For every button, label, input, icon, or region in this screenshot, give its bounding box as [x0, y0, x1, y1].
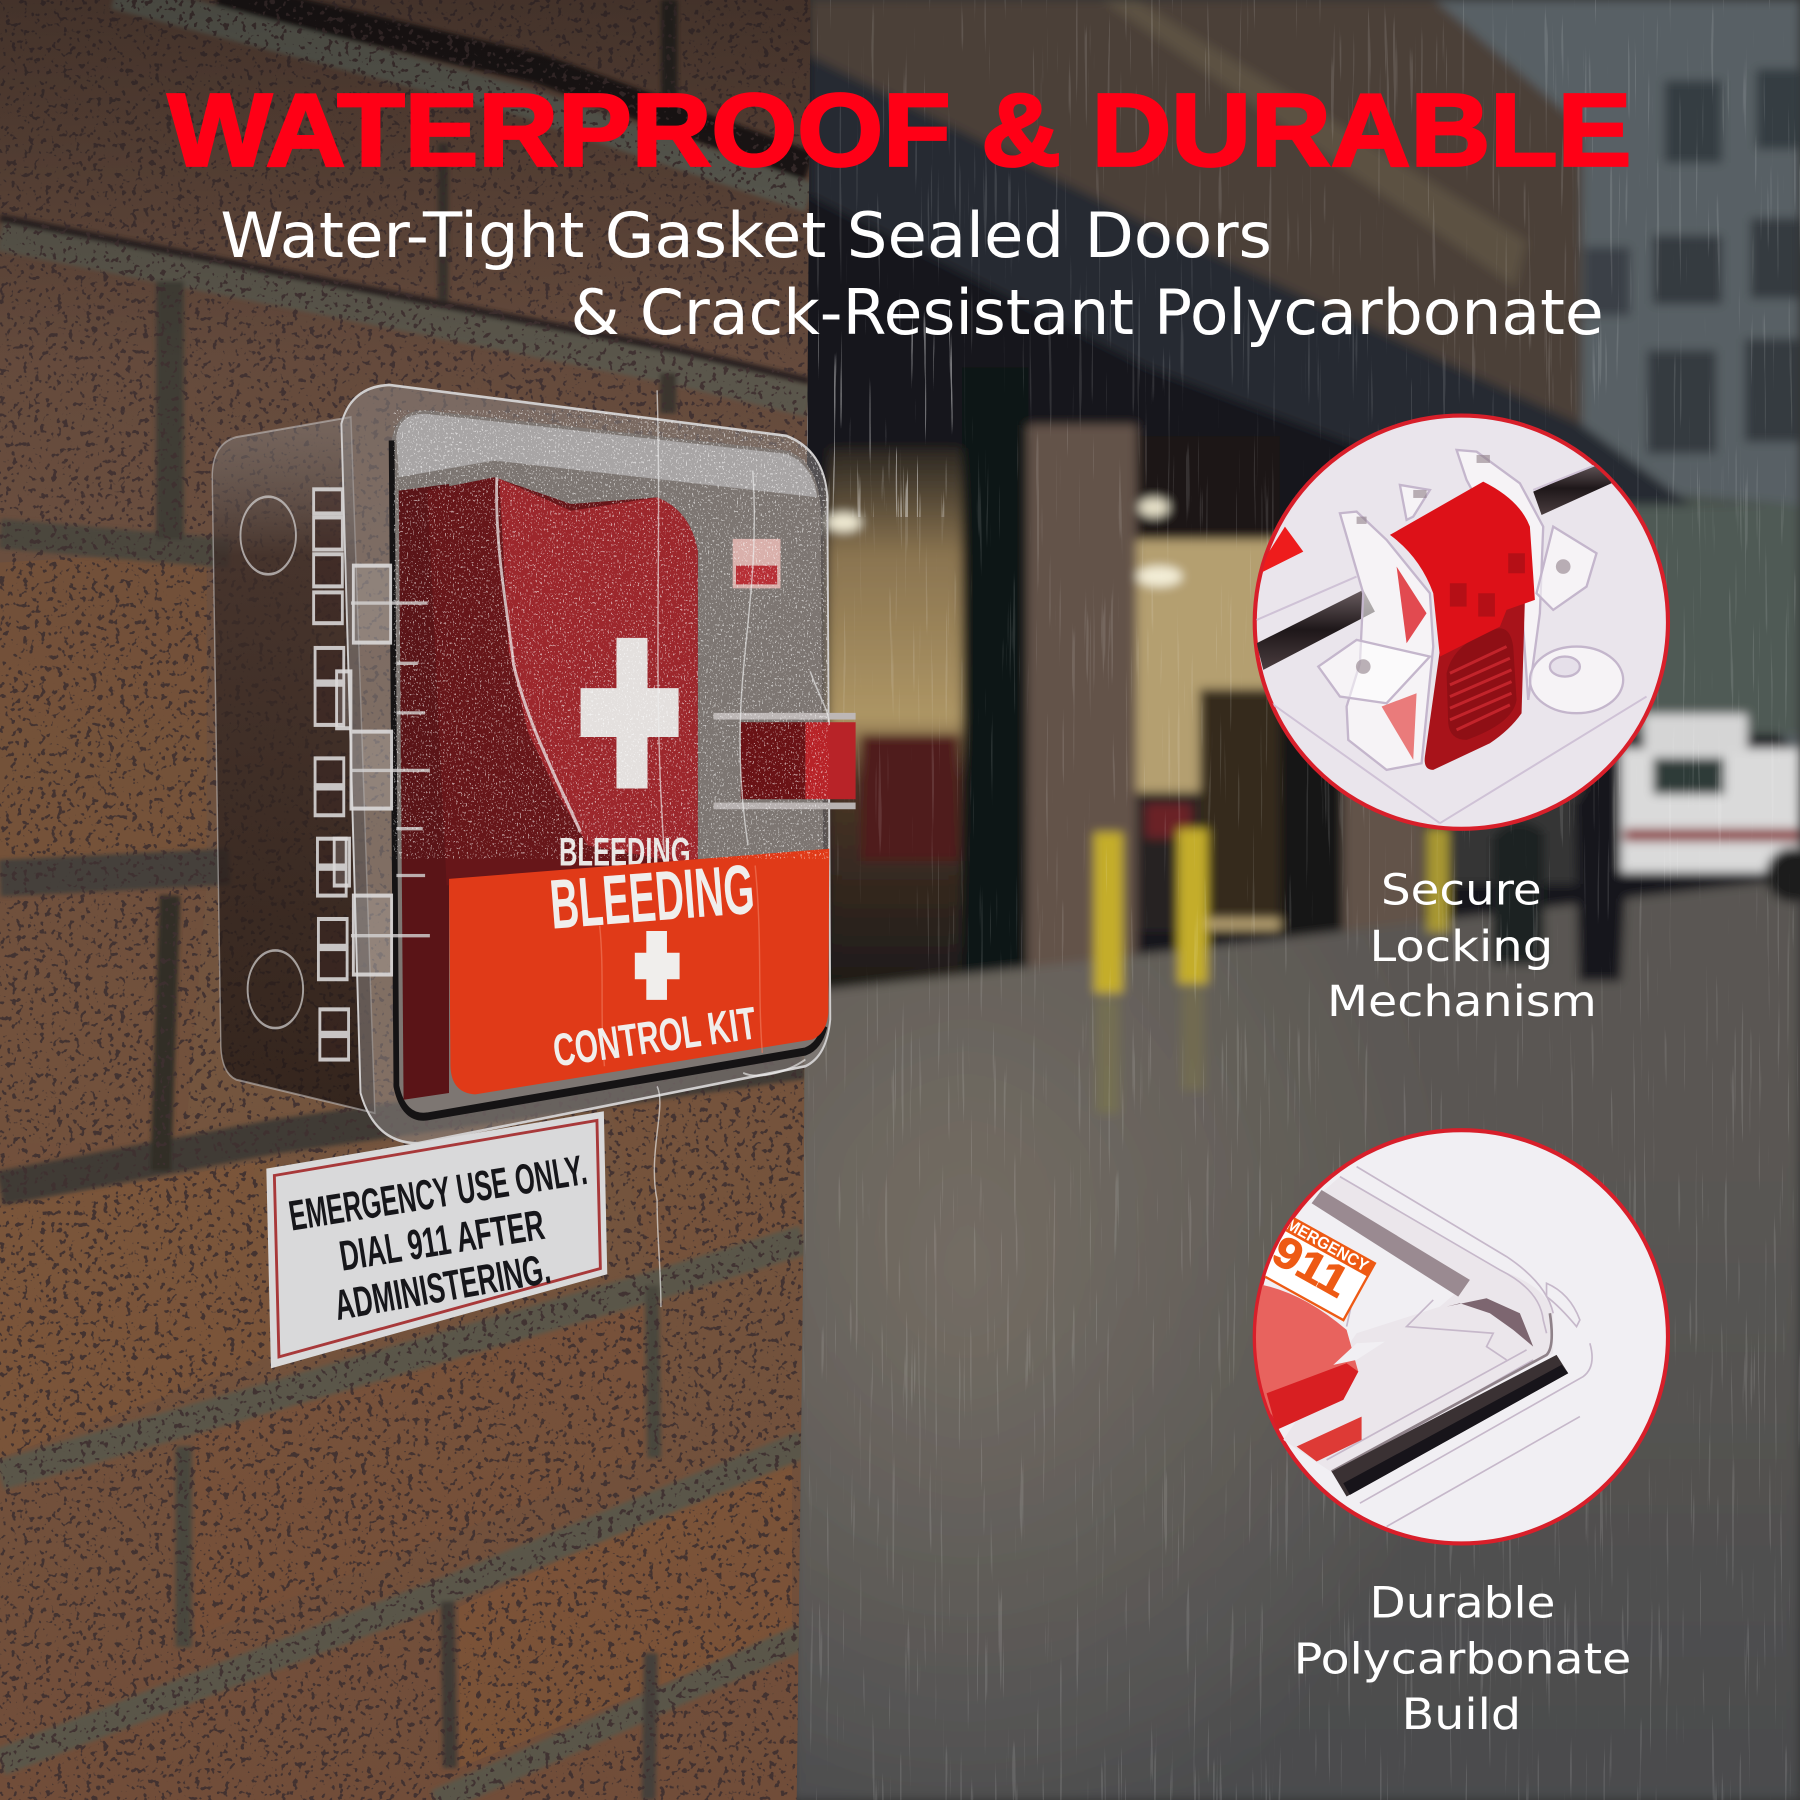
- subtitle: & Crack-Resistant Polycarbonate: [571, 276, 1604, 349]
- cabinet left mounting flange: [212, 417, 375, 1113]
- emergency sticker: [1264, 1218, 1376, 1322]
- emergency sticker: 911: [1264, 1227, 1356, 1307]
- mortar joints: [0, 0, 809, 1800]
- caption: secure locking mechanism: Locking: [1370, 923, 1553, 972]
- kit label wording: BLEEDING: [547, 850, 757, 944]
- warning sign: ADMINISTERING.: [331, 1245, 554, 1329]
- kit label wording: CONTROL KIT: [550, 996, 759, 1076]
- red pouch through clear lid: [1253, 1283, 1358, 1417]
- brick wall: [0, 0, 815, 1800]
- clear housing pieces: [1318, 450, 1623, 770]
- caption: secure locking mechanism: [1327, 867, 1597, 1027]
- inner red lining: [399, 484, 449, 1100]
- hinge knuckles: [314, 489, 349, 1060]
- subtitle: Water-Tight Gasket Sealed Doors: [220, 199, 1272, 272]
- grey gasket band: [1312, 1190, 1470, 1297]
- red seal reflection: [1397, 567, 1427, 643]
- small emergency sticker: [733, 539, 781, 588]
- background: rainy street scene: [792, 0, 1800, 1800]
- pouch text clipped by the label: BLEEDING: [559, 830, 691, 875]
- emergency sticker: EMERGENCY: [1274, 1210, 1372, 1275]
- subtitle: [220, 199, 1604, 349]
- clear piece glints: [1356, 455, 1571, 674]
- caption: durable polycarbonate build: [1294, 1579, 1631, 1740]
- brick tone variations: [460, 1467, 792, 1768]
- product: clear waterproof cabinet: [212, 385, 856, 1307]
- kit label wording: [547, 850, 759, 1076]
- black gasket rods: [1257, 590, 1375, 670]
- title: WATERPROOF & DURABLE: [168, 71, 1631, 187]
- detail circle: locking mechanism: [1253, 416, 1668, 829]
- red corner: [1262, 526, 1304, 572]
- caption: durable polycarbonate build: Build: [1402, 1691, 1521, 1740]
- warning sign: EMERGENCY USE ONLY.: [286, 1146, 590, 1240]
- water droplets on lid: [394, 410, 829, 859]
- cabinet body: [341, 385, 830, 1143]
- red pouch: [427, 477, 698, 886]
- warning sign: DIAL 911 AFTER: [336, 1201, 548, 1280]
- housing edge lines: [1327, 1167, 1592, 1527]
- orange kit label: [449, 849, 829, 1094]
- warning sign: [266, 1111, 607, 1368]
- black gasket: [1332, 1313, 1552, 1472]
- door gasket shadow: [392, 440, 825, 1117]
- caption: durable polycarbonate build: Durable: [1370, 1579, 1555, 1628]
- door top highlight: [396, 414, 817, 497]
- latch ribbed pad: [1447, 628, 1517, 740]
- water runoff: [600, 390, 829, 1307]
- mounting screw recesses: [240, 497, 303, 1028]
- latch top cap: [1390, 482, 1535, 657]
- white cross on pouch: [581, 638, 679, 788]
- cabinet door interior: [392, 410, 825, 1117]
- caption: secure locking mechanism: Mechanism: [1327, 978, 1597, 1027]
- locking latch: [714, 713, 856, 720]
- latch lower body: [1425, 600, 1525, 770]
- corner refraction: [1447, 1298, 1533, 1347]
- caption: durable polycarbonate build: Polycarbonate: [1294, 1636, 1631, 1685]
- caption: secure locking mechanism: Secure: [1381, 867, 1542, 916]
- pale housing band: [1283, 1177, 1553, 1473]
- detail circle: polycarbonate corner: [1238, 1130, 1668, 1543]
